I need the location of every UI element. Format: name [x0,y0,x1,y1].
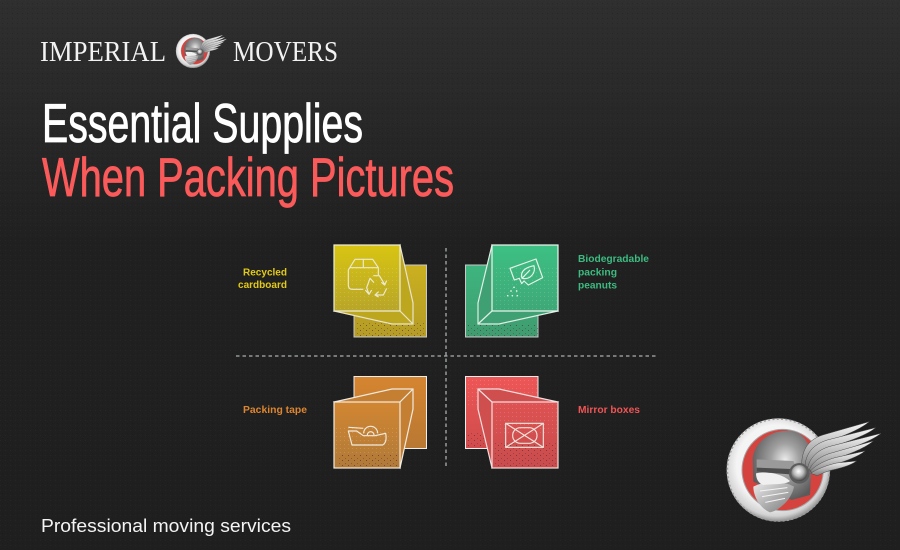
title [42,92,454,208]
label: Biodegradable packing peanuts [578,254,649,292]
icon: leaf speech bubble and peanuts [508,259,543,296]
logo wordmark: Imperial: IMPERIAL [40,37,166,68]
footer tagline: Professional moving services [41,515,291,536]
panel: biodegradable packing peanuts [466,245,649,337]
icon: fragile mirror crate [506,423,543,447]
box flap [478,245,558,324]
label: Recycled cardboard: Recycled [243,268,287,278]
label: Packing tape: Packing tape [243,405,307,416]
logo: Imperial Movers [40,34,338,68]
dashed cross dividers [236,248,657,466]
icon: box with recycling arrows [348,259,387,297]
logo emblem small [176,34,227,68]
logo wordmark: Movers: MOVERS [233,37,338,68]
panel: recycled cardboard [238,245,426,337]
box flap [478,389,558,468]
box front panel [478,245,558,324]
label: Mirror boxes: Mirror boxes [578,405,640,416]
box flap [334,389,413,468]
box back panel [354,265,426,337]
box back panel [466,376,538,448]
panel: mirror boxes [466,376,640,468]
box back panel [466,265,538,337]
title line 2: When Packing Pictures [42,146,454,208]
box flap [334,245,413,324]
label: Biodegradable packing peanuts: Biodegradable [578,254,649,265]
icon: winged helmet emblem [727,418,881,522]
label: Biodegradable packing peanuts: packing [578,268,617,278]
box front panel [478,389,558,468]
box front panel [334,245,413,324]
panel: packing tape [243,376,426,468]
label: Recycled cardboard [238,268,287,291]
label: Biodegradable packing peanuts: peanuts [578,280,617,292]
box back panel [354,376,426,448]
title line 1: Essential Supplies [42,92,363,154]
box front panel [334,389,413,468]
label: Recycled cardboard: cardboard [238,280,287,291]
icon: tape dispenser [348,426,386,445]
